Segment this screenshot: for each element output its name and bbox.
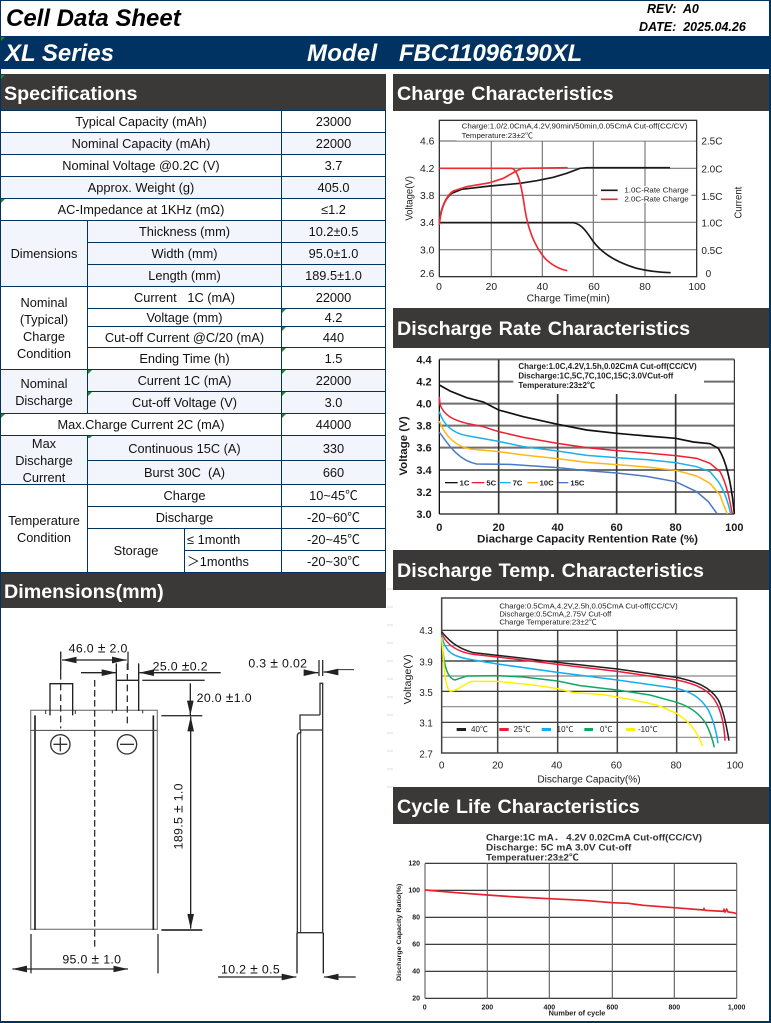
row: nominal voltage: 3.7: [325, 158, 342, 173]
right axis: 0.5C: [701, 246, 722, 257]
legend: 10℃: [557, 725, 574, 734]
row: max charge current: 44000: [316, 417, 351, 432]
left axis: Voltage(V): [404, 176, 415, 221]
row: storage over one month: ＞1months: [187, 554, 249, 569]
y axis: 3.1: [419, 719, 433, 730]
y axis: 3.9: [419, 657, 433, 668]
row: storage over one month: [187, 554, 360, 569]
heading: dimensions: [1, 573, 386, 608]
line chart: discharge temperature curves: [403, 597, 744, 785]
left axis: [404, 136, 435, 280]
row: burst discharge: 660: [323, 465, 344, 480]
x axis: [423, 1004, 746, 1011]
row: cut-off voltage: Cut-off Voltage (V): [132, 395, 237, 410]
y axis: 2.7: [419, 749, 433, 760]
heading: cycle life characteristics: [393, 787, 769, 824]
dimension: tab length: [142, 680, 252, 716]
heading: specifications: Specifications: [4, 83, 137, 105]
row: thickness: Thickness (mm): [139, 224, 230, 239]
bottom axis: 80: [639, 282, 651, 293]
y axis: [398, 354, 433, 521]
row: length: Length (mm): [148, 268, 221, 283]
row: typical capacity: Discharge: [15, 392, 73, 408]
row: discharge current: Current 1C (mA): [138, 373, 231, 388]
left axis: 3.4: [420, 218, 435, 229]
row: continuous discharge: Discharge: [15, 452, 73, 468]
heading: dimensions: Dimensions(mm): [4, 581, 164, 603]
heading: discharge rate characteristics: Discharge Rate Characteristics: [397, 318, 690, 340]
chart note: Temperatuer:23±2℃: [486, 852, 579, 862]
row: cut-off current: Cut-off Current @C/20 (mA): [105, 330, 264, 344]
row: typical capacity: Charge: [23, 329, 65, 344]
y axis: 60: [412, 942, 420, 949]
series and model band: [0, 36, 769, 69]
x axis title: Discharge Capacity(%): [537, 774, 641, 785]
row: charge voltage: Voltage (mm): [146, 310, 223, 325]
chart note: Discharge: 5C mA 3.0V Cut-off: [486, 843, 632, 853]
row: storage up to one month: [114, 532, 360, 558]
bottom axis: [436, 282, 706, 304]
legend: 2.0C-Rate Charge: [624, 195, 689, 204]
row: nominal capacity: 22000: [316, 136, 351, 151]
x axis: 100: [727, 761, 744, 772]
panel: cycle life characteristics: [393, 787, 769, 1017]
x axis: [436, 522, 744, 534]
row: charge temperature: Charge: [164, 488, 205, 503]
x axis: 0: [439, 761, 445, 772]
row: continuous discharge: [1, 436, 385, 484]
x axis: 600: [606, 1004, 618, 1011]
y axis: 20: [412, 996, 420, 1003]
right axis: [701, 137, 744, 280]
y axis: 40: [412, 969, 420, 976]
bottom axis: 60: [588, 282, 600, 293]
chart note: Charge:0.5CmA,4.2V,2.5h,0.05CmA Cut-off(CC/CV): [499, 602, 678, 611]
x axis: 60: [611, 761, 622, 772]
row: typical capacity: (Typical): [20, 312, 68, 327]
y axis: [403, 626, 433, 760]
dimension: tab thickness: 0.3 ± 0.02: [248, 654, 307, 670]
y axis: Voltage(V): [403, 654, 414, 704]
x axis: 0: [436, 522, 442, 534]
legend: 40℃: [471, 725, 488, 734]
row: typical capacity: Condition: [17, 530, 71, 544]
row: cut-off current: [105, 330, 344, 344]
x axis: 40: [552, 522, 564, 534]
left axis: 4.2: [420, 164, 435, 175]
heading: discharge rate characteristics: [393, 308, 769, 348]
x axis: [439, 761, 744, 772]
legend: [601, 186, 689, 204]
chart note: Charge Temperature:23±2℃: [499, 617, 597, 626]
row: continuous discharge: 330: [323, 440, 344, 456]
technical drawing: [12, 640, 356, 980]
panel: discharge temperature characteristics: [393, 550, 769, 785]
x axis: 0: [423, 1004, 427, 1011]
header: [1, 2, 769, 69]
y axis: Discharge Capacity Ratio(%): [396, 884, 403, 981]
curves: [439, 168, 671, 273]
x axis: 20: [492, 761, 504, 772]
dimension: tab spacing: [61, 640, 128, 673]
left axis: 3.0: [420, 245, 435, 256]
bottom axis: 0: [436, 282, 442, 293]
row: cut-off voltage: [88, 392, 385, 413]
legend: 10C: [540, 478, 554, 487]
dimension: cell width: 95.0 ± 1.0: [62, 950, 121, 966]
row: burst discharge: [88, 461, 385, 484]
row: charge current: [17, 290, 351, 361]
row: length: 189.5±1.0: [305, 268, 362, 283]
x axis: 400: [543, 1004, 555, 1011]
legend: 5C: [486, 478, 497, 487]
row: storage up to one month: ≤ 1month: [187, 532, 240, 547]
legend: [445, 478, 585, 487]
row: AC impedance: [58, 202, 346, 217]
y axis: 3.5: [419, 688, 433, 699]
row: nominal capacity: [1, 133, 385, 154]
row: discharge current: Nominal: [21, 376, 67, 390]
row: width: Width (mm): [151, 246, 218, 261]
heading: discharge temperature characteristics: Discharge Temp. Characteristics: [397, 560, 704, 582]
panel: discharge rate characteristics: [393, 308, 769, 545]
dimension: cell thickness: 10.2 ± 0.5: [221, 961, 280, 977]
row: discharge temperature: -20~60℃: [307, 510, 360, 525]
curves: [439, 385, 734, 514]
heading: charge characteristics: [393, 74, 769, 111]
row: typical capacity: Typical Capacity (mAh): [75, 114, 207, 129]
legend: 1C: [460, 478, 470, 487]
row: ending time: 1.5: [325, 351, 342, 366]
bottom axis: 40: [537, 282, 548, 293]
y axis: 100: [408, 888, 420, 895]
x axis: 80: [670, 522, 682, 534]
x axis: 200: [481, 1004, 493, 1011]
dimension: tab width: [81, 658, 221, 674]
x axis: 60: [611, 522, 623, 534]
heading: specifications: [1, 74, 386, 110]
chart note: Temperature:23±2℃: [518, 381, 595, 390]
row: typical capacity: [1, 114, 385, 569]
chart note: Temperature:23±2℃: [462, 131, 533, 140]
row: discharge temperature: Discharge: [156, 510, 213, 525]
dimension: tab spacing: 46.0 ± 2.0: [69, 640, 128, 656]
right axis: Current: [733, 186, 744, 219]
faint sheet ticks: [387, 588, 393, 788]
row: thickness: 10.2±0.5: [309, 224, 358, 239]
legend: 7C: [513, 478, 523, 487]
y axis: 3.0: [416, 509, 432, 521]
y axis: 3.4: [416, 465, 433, 477]
dimension: cell thickness: [218, 961, 356, 977]
row: charge temperature: [8, 488, 358, 544]
chart note: [486, 833, 702, 862]
y axis: 120: [408, 861, 420, 868]
row: weight: 405.0: [317, 180, 350, 195]
right axis: 1.5C: [701, 192, 722, 203]
right axis: 2.5C: [701, 137, 722, 148]
row: charge current: Current 1C (mA): [134, 290, 235, 305]
line chart: charge curves: [404, 120, 744, 304]
row: charge current: Nominal: [21, 295, 67, 310]
y axis: 4.4: [416, 354, 433, 366]
row: continuous discharge: Max: [32, 436, 56, 450]
row: discharge temperature: [156, 510, 360, 525]
legend: 0℃: [600, 725, 612, 734]
legend: 15C: [570, 478, 585, 487]
row: cut-off voltage: 3.0: [325, 395, 342, 410]
model number: FBC11096190XL: [399, 40, 582, 67]
row: ending time: [139, 351, 342, 366]
row: ending time: Ending Time (h): [139, 351, 230, 366]
y axis: Voltage (V): [398, 416, 410, 476]
chart note: [499, 602, 678, 626]
chart note: Discharge:1C,5C,7C,10C,15C;3.0VCut-off: [518, 372, 674, 381]
row: continuous discharge: Continuous 15C (A): [128, 440, 241, 456]
chart note: Charge:1.0/2.0CmA,4.2V,90min/50min,0.05CmA Cut-off(CC/CV): [462, 122, 688, 131]
row: typical capacity: Current: [23, 470, 65, 484]
x axis: 800: [668, 1004, 680, 1011]
dimension: cell width: [12, 934, 158, 973]
x axis: 40: [551, 761, 563, 772]
bottom axis: 20: [486, 282, 497, 293]
model label: Model: [307, 40, 377, 67]
panel: charge characteristics: [393, 74, 769, 304]
left axis: 2.6: [420, 269, 435, 280]
legend: -10℃: [638, 725, 658, 734]
legend: 1.0C-Rate Charge: [624, 186, 689, 195]
y axis: 3.2: [416, 487, 432, 499]
row: charge current: 22000: [316, 290, 351, 305]
y axis: 4.2: [416, 377, 432, 389]
row: nominal voltage: Nominal Voltage @0.2C (V): [62, 158, 220, 173]
icon: negative terminal: [117, 735, 137, 754]
chart note: [518, 362, 697, 390]
row: charge voltage: [146, 310, 342, 325]
x axis: 20: [493, 522, 505, 534]
right axis: 2.0C: [701, 164, 722, 175]
x axis title: Number of cycle: [549, 1010, 605, 1017]
row: storage over one month: -20~30℃: [307, 554, 360, 569]
revision: REV: A0: [647, 2, 699, 16]
curves: [442, 632, 729, 747]
chart note: [462, 122, 688, 140]
right axis: 0: [706, 269, 712, 280]
line chart: cycle life curve: [396, 833, 746, 1017]
panel: specifications: [1, 74, 386, 573]
y axis: 80: [412, 915, 420, 922]
heading: charge characteristics: Charge Characteristics: [397, 83, 614, 105]
specifications table: [1, 110, 386, 573]
heading: cycle life characteristics: Cycle Life Characteristics: [397, 796, 640, 818]
row: weight: [1, 177, 385, 198]
x axis: 80: [670, 761, 682, 772]
row: max charge current: [57, 417, 351, 432]
dimension: tab length: 20.0 ±1.0: [197, 689, 252, 705]
x axis: 1,000: [728, 1004, 746, 1011]
icon: positive terminal: [51, 735, 70, 754]
front view of cell: [31, 652, 157, 948]
line chart: discharge rate curves: [398, 354, 744, 545]
row: nominal voltage: [62, 158, 342, 173]
row: width: 95.0±1.0: [309, 246, 358, 261]
dimension: tab width: 25.0 ±0.2: [153, 658, 208, 674]
y axis: 3.6: [416, 443, 432, 455]
row: charge voltage: 4.2: [325, 310, 342, 325]
chart note: Charge:1C mA． 4.2V 0.02CmA Cut-off(CC/CV): [486, 833, 702, 843]
side view of cell: [297, 683, 323, 973]
series name: XL Series: [5, 40, 114, 67]
dimension: tab thickness: [248, 654, 354, 676]
row: AC impedance: AC-Impedance at 1KHz (mΩ): [58, 202, 224, 217]
left axis: 3.8: [420, 191, 435, 202]
row: length: [88, 265, 385, 286]
row: storage up to one month: -20~45℃: [307, 532, 360, 547]
row: thickness: [1, 221, 385, 286]
legend: 25℃: [514, 725, 531, 734]
chart note: Discharge:0.5CmA,2.75V Cut-off: [499, 610, 612, 619]
row: weight: Approx. Weight (g): [88, 180, 194, 195]
row: burst discharge: Burst 30C (A): [144, 465, 225, 480]
row: storage up to one month: Storage: [114, 543, 158, 558]
capacity curve: [425, 890, 737, 914]
row: charge temperature: 10~45℃: [309, 488, 358, 503]
row: typical capacity: Temperature: [8, 512, 80, 528]
row: cut-off current: 440: [323, 330, 344, 344]
y axis: 3.8: [416, 421, 432, 433]
row: typical capacity: 23000: [316, 114, 351, 129]
row: max charge current: Max.Charge Current 2C (mA): [57, 417, 225, 432]
bottom axis: Charge Time(min): [527, 293, 610, 304]
panel: dimensions: [1, 573, 386, 980]
row: typical capacity: Dimensions: [11, 246, 77, 261]
bottom axis: 100: [688, 282, 706, 293]
chart note: Charge:1.0C,4.2V,1.5h,0.02CmA Cut-off(CC/CV): [518, 362, 697, 371]
y axis: 4.3: [419, 626, 433, 637]
row: nominal capacity: Nominal Capacity (mAh): [72, 136, 210, 151]
row: typical capacity: Condition: [17, 346, 71, 361]
x axis title: Diacharge Capacity Rentention Rate (%): [477, 533, 698, 545]
row: width: [88, 243, 385, 264]
left axis: 4.6: [420, 136, 435, 147]
x axis: 100: [725, 522, 744, 534]
title: Cell Data Sheet: [6, 5, 181, 32]
row: discharge current: [1, 370, 385, 413]
date: DATE: 2025.04.26: [639, 20, 746, 34]
right axis: 1.0C: [701, 218, 722, 229]
heading: discharge temperature characteristics: [393, 550, 769, 590]
dimension: cell length: 189.5 ± 1.0: [169, 783, 185, 849]
y axis: 4.0: [416, 399, 432, 411]
row: AC impedance: ≤1.2: [321, 202, 346, 217]
row: discharge current: 22000: [316, 373, 351, 388]
y axis: [396, 861, 420, 1003]
legend: [457, 725, 658, 734]
cell corner markers: [1, 37, 286, 438]
